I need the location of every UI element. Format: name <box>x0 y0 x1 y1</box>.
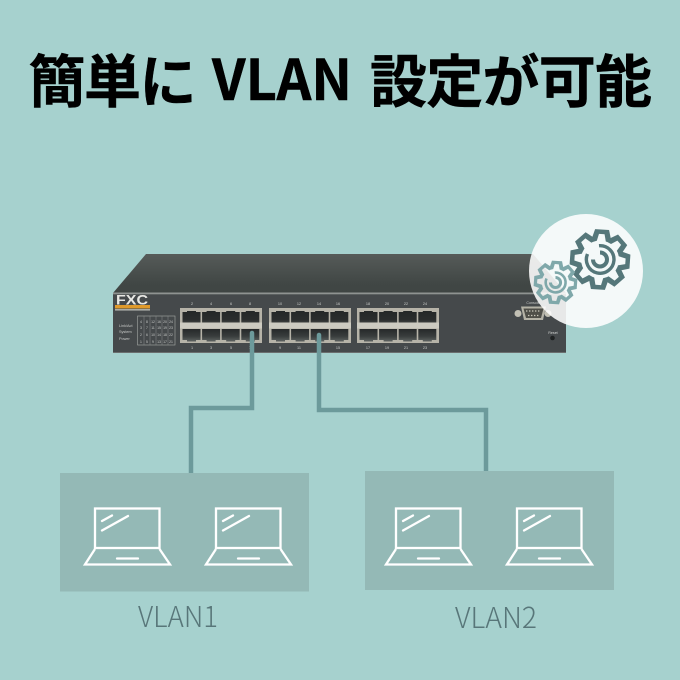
port numbers: 6 <box>230 302 232 306</box>
icon: large gear <box>568 228 632 292</box>
port numbers: 9 <box>279 346 281 350</box>
LED table: 24 <box>169 320 173 324</box>
switch top panel <box>113 254 566 293</box>
title: VLAN <box>211 36 352 117</box>
port numbers: 17 <box>366 346 370 350</box>
console connector: Console <box>526 301 540 305</box>
status labels: System <box>119 330 132 334</box>
label: VLAN1: VLAN1 <box>138 594 218 636</box>
LED table: 9 <box>152 340 154 344</box>
title <box>28 36 652 119</box>
LED table: 7 <box>146 326 148 330</box>
panel: VLAN2 <box>365 471 614 590</box>
label: VLAN2: VLAN2 <box>455 595 537 637</box>
port numbers: 22 <box>404 302 408 306</box>
connection line VLAN2 <box>319 335 486 473</box>
LED table: 11 <box>151 326 155 330</box>
LED table <box>138 316 175 345</box>
reset button: Reset <box>548 331 558 335</box>
port numbers: 1 <box>191 346 193 350</box>
port numbers: 4 <box>210 302 212 306</box>
icon: laptop 3 <box>386 508 471 564</box>
network switch <box>113 254 566 353</box>
port block 1 <box>180 308 262 343</box>
port numbers: 19 <box>385 346 389 350</box>
LED table: 19 <box>163 326 167 330</box>
FXC logo <box>115 292 150 311</box>
LED table: 18 <box>163 333 167 337</box>
LED table: 17 <box>163 340 167 344</box>
LED table: 20 <box>163 320 167 324</box>
icon: small gear <box>532 259 579 306</box>
port numbers: 21 <box>404 346 408 350</box>
title: 設定が可能 <box>370 37 652 119</box>
port numbers: 18 <box>366 302 370 306</box>
port block 3 <box>357 308 439 343</box>
port numbers: 5 <box>230 346 232 350</box>
LED table: 12 <box>151 320 155 324</box>
icon: laptop 2 <box>206 508 291 564</box>
port numbers: 14 <box>317 302 321 306</box>
LED table: 3 <box>140 326 142 330</box>
port numbers: 8 <box>249 302 251 306</box>
connection line VLAN1 <box>191 333 252 474</box>
LED table: 1 <box>140 340 142 344</box>
icon: laptop 1 <box>85 508 170 564</box>
LED table: 8 <box>146 320 148 324</box>
port numbers: 16 <box>336 302 340 306</box>
port numbers: 10 <box>278 302 282 306</box>
port numbers: 2 <box>191 302 193 306</box>
LED table: 5 <box>146 340 148 344</box>
status labels: Power <box>119 337 130 341</box>
status labels: Link/Act <box>119 324 133 328</box>
port block 2 <box>269 308 351 343</box>
LED table: 13 <box>157 340 161 344</box>
LED table: 15 <box>157 326 161 330</box>
port numbers: 3 <box>210 346 212 350</box>
switch front panel <box>113 292 566 353</box>
reset button <box>548 331 558 340</box>
icon: laptop 4 <box>507 508 592 564</box>
port numbers: 11 <box>297 346 301 350</box>
LED table: 23 <box>169 326 173 330</box>
port numbers: 13 <box>317 346 321 350</box>
FXC logo: FXC <box>116 292 148 308</box>
LED table: 6 <box>146 333 148 337</box>
LED table: 10 <box>151 333 155 337</box>
title: 簡単に <box>28 37 196 119</box>
port numbers: 24 <box>423 302 427 306</box>
status labels <box>119 324 133 341</box>
LED table: 4 <box>140 320 142 324</box>
port numbers: 23 <box>423 346 427 350</box>
port numbers: 15 <box>336 346 340 350</box>
console connector <box>514 301 552 320</box>
settings badge <box>529 214 643 328</box>
LED table: 21 <box>169 340 173 344</box>
LED table: 14 <box>157 333 161 337</box>
port numbers: 12 <box>297 302 301 306</box>
port numbers: 7 <box>249 346 251 350</box>
badge circle <box>529 214 643 328</box>
LED table: 22 <box>169 333 173 337</box>
LED table: 2 <box>140 333 142 337</box>
port numbers: 20 <box>385 302 389 306</box>
panel: VLAN1 <box>60 473 309 592</box>
LED table: 16 <box>157 320 161 324</box>
port numbers <box>191 302 427 350</box>
